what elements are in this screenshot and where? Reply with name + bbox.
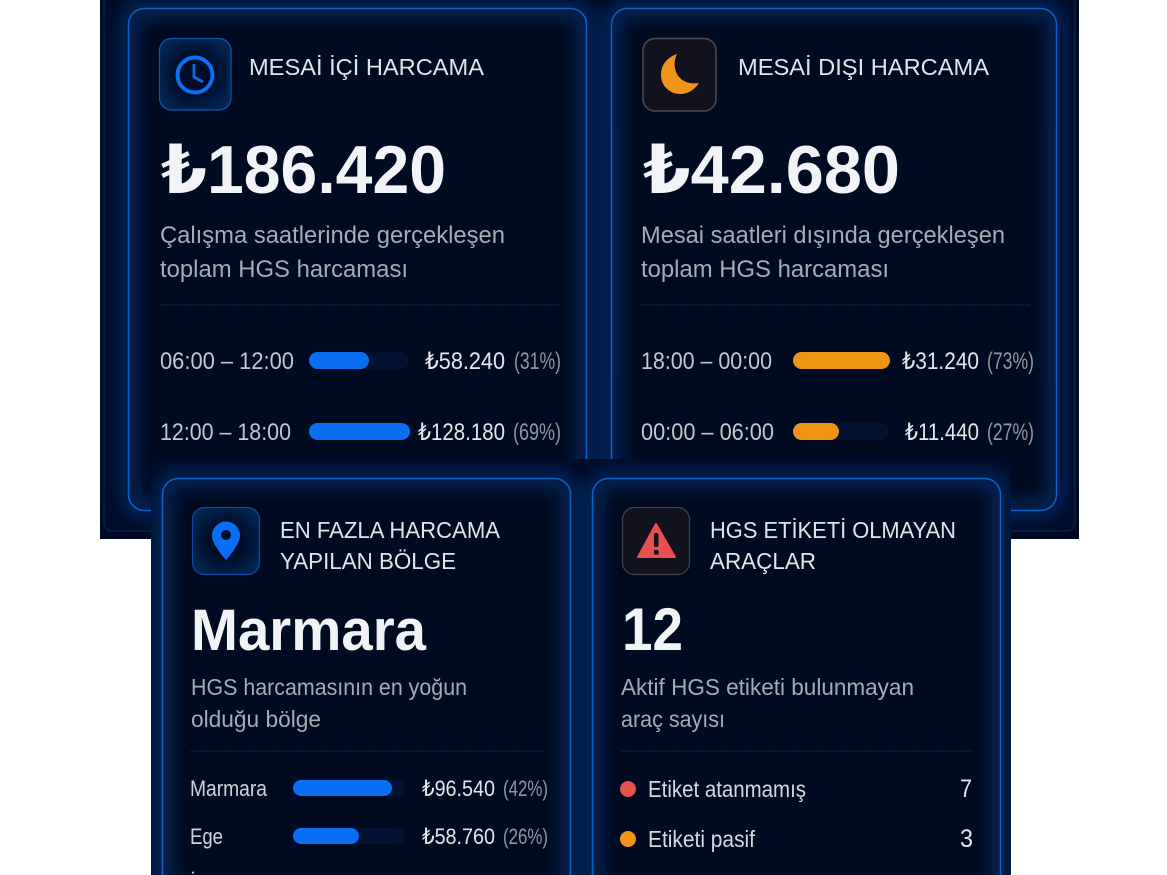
description text: HGS harcamasının en yoğun	[191, 674, 467, 700]
row: Marmara: (42%)	[503, 776, 548, 801]
row: 06:00 – 12:00	[160, 352, 560, 374]
row: Ege	[192, 828, 547, 848]
description text	[191, 674, 467, 732]
row: 06:00 – 12:00: 06:00 – 12:00	[160, 348, 294, 375]
description text	[621, 674, 914, 732]
row: Marmara: ₺96.540	[422, 776, 495, 801]
heading: mesai dışı harcama: MESAİ DIŞI HARCAMA	[738, 54, 990, 80]
description text: toplam HGS harcaması	[641, 256, 889, 283]
heading: en fazla harcama yapılan bölge	[280, 522, 500, 569]
row: etiketi pasif: 3	[960, 825, 973, 853]
description text: Mesai saatleri dışında gerçekleşen	[641, 222, 1005, 249]
description text	[641, 222, 1005, 283]
row: 00:00 – 06:00: ₺11.440	[905, 419, 979, 446]
heading: hgs etiketi olmayan araçlar: HGS ETİKETİ OLMAYAN	[710, 517, 956, 543]
row: Ege: ₺58.760	[422, 824, 495, 849]
card: hgs etiketi olmayan araçlar	[592, 478, 1001, 875]
big number: 42.680: ₺42.680	[643, 132, 900, 208]
row: etiketi pasif: Etiketi pasif	[648, 826, 756, 852]
icon: moon	[643, 38, 716, 111]
row: etiketi pasif	[620, 829, 972, 852]
row: 18:00 – 00:00: 18:00 – 00:00	[641, 348, 772, 375]
icon: location pin	[192, 508, 260, 574]
heading: hgs etiketi olmayan araçlar	[710, 517, 956, 574]
card: mesai dışı harcama	[611, 8, 1057, 511]
panel: bottom dashboard section	[151, 459, 1011, 875]
heading: en fazla harcama yapılan bölge: EN FAZLA HARCAMA	[280, 517, 501, 543]
description text: araç sayısı	[621, 706, 725, 732]
description text: Çalışma saatlerinde gerçekleşen	[160, 222, 505, 249]
row: Marmara	[192, 780, 547, 800]
row: etiket atanmamış: Etiket atanmamış	[648, 776, 806, 802]
row: Marmara: Marmara	[190, 776, 268, 801]
description text: toplam HGS harcaması	[160, 256, 408, 283]
panel: top dashboard section	[100, 0, 1079, 539]
row: 12:00 – 18:00: 12:00 – 18:00	[160, 419, 291, 446]
big value: 12: 12	[622, 596, 683, 663]
row: 12:00 – 18:00	[162, 422, 560, 445]
card: mesai içi harcama	[128, 8, 587, 511]
row: 18:00 – 00:00	[642, 352, 1033, 374]
row: 18:00 – 00:00: ₺31.240	[902, 348, 979, 375]
heading: hgs etiketi olmayan araçlar: ARAÇLAR	[710, 548, 816, 574]
description text: olduğu bölge	[191, 706, 321, 732]
row: Ege: (26%)	[503, 824, 548, 849]
heading: en fazla harcama yapılan bölge: YAPILAN BÖLGE	[280, 548, 456, 574]
row: Ege: Ege	[190, 824, 223, 849]
icon: warning triangle	[622, 508, 690, 574]
card: en fazla harcama yapılan bölge	[162, 478, 571, 875]
row: 00:00 – 06:00	[642, 422, 1033, 445]
description text	[160, 222, 505, 283]
row: 06:00 – 12:00: (31%)	[514, 348, 561, 375]
row: 00:00 – 06:00: 00:00 – 06:00	[641, 419, 774, 446]
row: 12:00 – 18:00: ₺128.180	[418, 419, 505, 446]
row: 06:00 – 12:00: ₺58.240	[425, 348, 505, 375]
row: 12:00 – 18:00: (69%)	[513, 419, 561, 446]
big number: 186.420: ₺186.420	[161, 132, 446, 208]
row: 18:00 – 00:00: (73%)	[987, 348, 1034, 375]
row: 00:00 – 06:00: (27%)	[987, 419, 1034, 446]
heading: mesai içi harcama: MESAİ İÇİ HARCAMA	[249, 54, 485, 80]
big value: Marmara: Marmara	[191, 598, 427, 663]
row: etiket atanmamış: 7	[960, 775, 972, 803]
icon: clock	[160, 38, 231, 110]
row: etiket atanmamış	[620, 780, 971, 802]
description text: Aktif HGS etiketi bulunmayan	[621, 674, 914, 700]
